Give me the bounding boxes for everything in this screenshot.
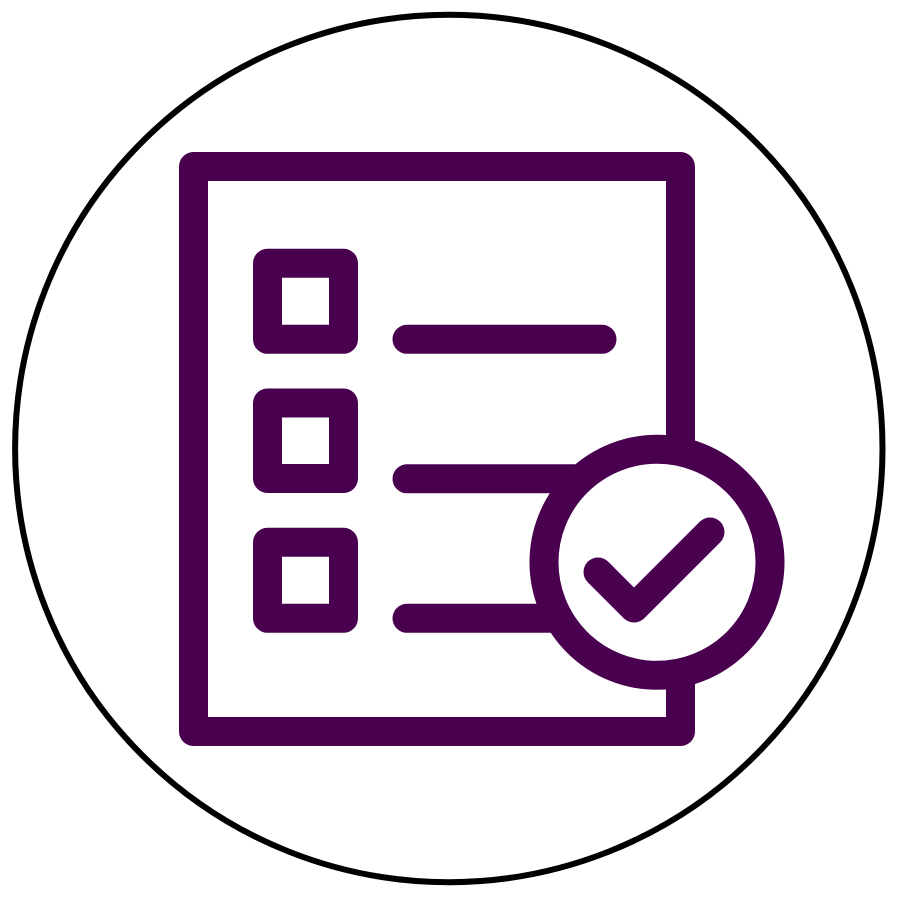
check badge xyxy=(544,449,770,675)
check mark xyxy=(598,532,710,608)
checklist items xyxy=(268,263,602,618)
line 2 xyxy=(407,464,600,493)
document page outline xyxy=(194,166,680,732)
checkbox 3 xyxy=(268,542,344,618)
badge circle xyxy=(544,449,770,675)
line 1 xyxy=(407,325,602,354)
line 3 xyxy=(407,604,600,633)
checkbox 1 xyxy=(268,263,344,339)
checkbox 2 xyxy=(268,403,344,478)
